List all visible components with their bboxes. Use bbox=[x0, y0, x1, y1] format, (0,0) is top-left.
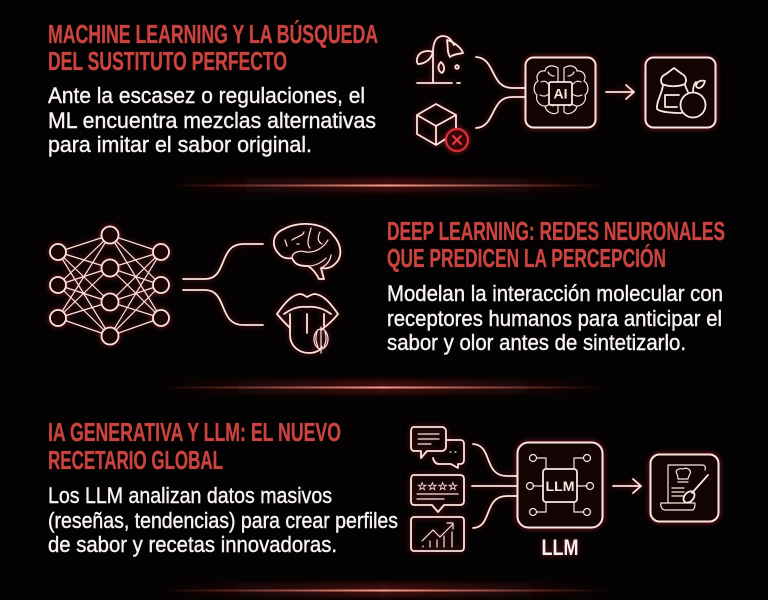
icon: LLM chip box: LLM bbox=[546, 478, 574, 494]
connectors bbox=[472, 444, 517, 528]
heading: generative AI: RECETARIO GLOBAL bbox=[48, 445, 223, 475]
divider 1 bbox=[170, 178, 605, 192]
icon: AI brain box bbox=[526, 58, 596, 128]
icon: wilted plant bbox=[417, 36, 463, 83]
text block: deep learning: Modelan la interacción molecular con bbox=[387, 281, 723, 306]
text block: generative AI: de sabor y recetas innovadoras. bbox=[48, 532, 337, 557]
icon: AI brain box: AI bbox=[554, 86, 568, 102]
icon: chat bubbles bbox=[411, 427, 464, 468]
heading: generative AI: IA GENERATIVA Y LLM: EL NUEVO bbox=[48, 417, 341, 447]
connectors bbox=[476, 57, 525, 128]
arrow bbox=[613, 479, 641, 493]
heading: machine learning bbox=[48, 19, 378, 76]
text block: machine learning: Ante la escasez o regulaciones, el bbox=[48, 83, 365, 108]
heading: machine learning: MACHINE LEARNING Y LA BÚSQUEDA bbox=[48, 19, 378, 49]
text block: generative AI bbox=[48, 483, 398, 557]
panel: generative AI bbox=[48, 417, 718, 560]
text block: deep learning: receptores humanos para anticipar el bbox=[387, 306, 722, 331]
text block: deep learning: sabor y olor antes de sintetizarlo. bbox=[387, 330, 686, 355]
icon: neural network bbox=[50, 226, 169, 344]
heading: generative AI bbox=[48, 417, 341, 475]
panel: machine learning bbox=[48, 19, 716, 157]
diagram: neural network to senses bbox=[50, 224, 340, 353]
diagram: LLM flow bbox=[411, 427, 718, 560]
label: LLM: LLM bbox=[542, 535, 578, 560]
text block: machine learning: para imitar el sabor original. bbox=[48, 132, 312, 157]
arrow bbox=[606, 85, 634, 99]
icon: review card bbox=[411, 475, 464, 512]
icon: product box with jar and apple bbox=[646, 58, 716, 128]
divider 3 bbox=[160, 583, 610, 597]
text block: generative AI: Los LLM analizan datos masivos bbox=[48, 483, 332, 508]
panel: deep learning bbox=[50, 216, 725, 355]
connectors bbox=[183, 244, 263, 325]
icon: tongue with herb bbox=[277, 294, 338, 353]
icon: box with cross bbox=[417, 104, 468, 151]
text block: deep learning bbox=[387, 281, 723, 355]
icon: recipe box bbox=[650, 454, 718, 522]
heading: machine learning: DEL SUSTITUTO PERFECTO bbox=[48, 46, 287, 76]
icon: trend chart card bbox=[411, 517, 464, 551]
heading: deep learning bbox=[387, 216, 725, 273]
text block: machine learning: ML encuentra mezclas alternativas bbox=[48, 108, 376, 133]
text block: generative AI: (reseñas, tendencias) para crear perfiles bbox=[48, 508, 398, 533]
text block: machine learning bbox=[48, 83, 376, 157]
icon: brain bbox=[274, 224, 340, 279]
icon: review card: ☆☆☆☆ bbox=[417, 480, 458, 493]
icon: LLM chip box bbox=[518, 442, 602, 528]
divider 2 bbox=[160, 380, 605, 394]
diagram: machine learning flow bbox=[417, 36, 716, 151]
